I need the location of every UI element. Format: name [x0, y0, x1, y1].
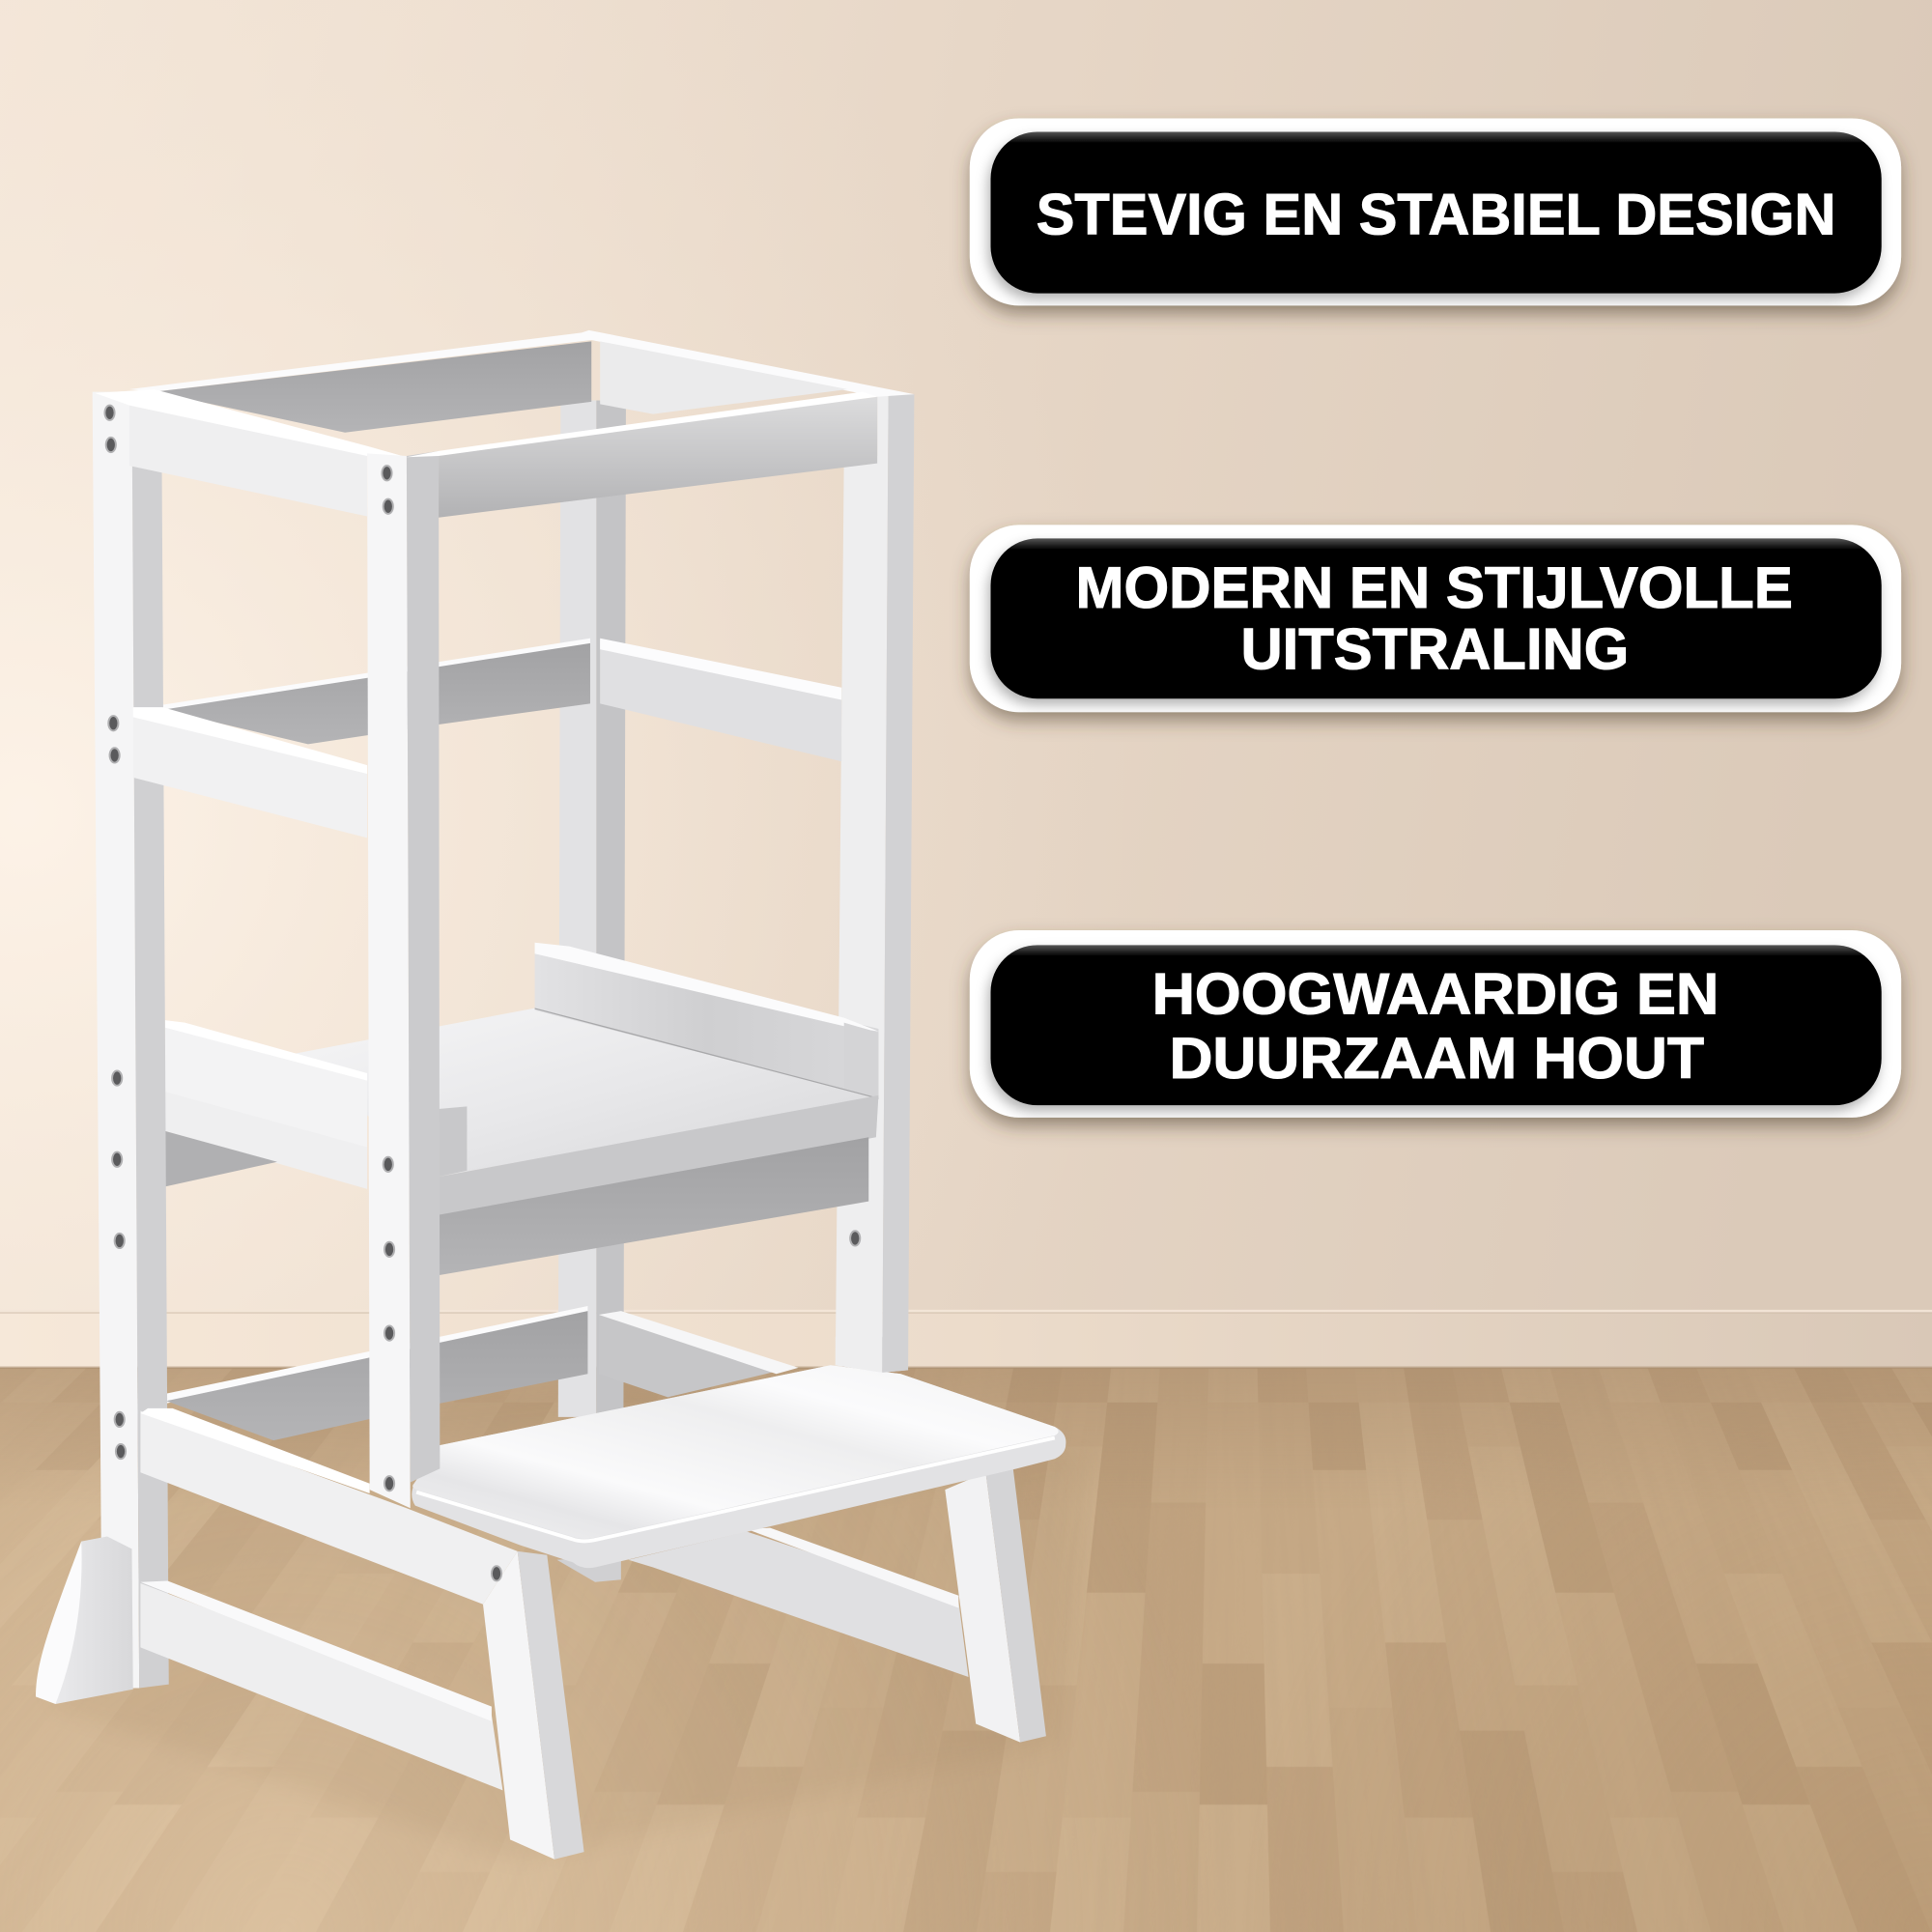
badge text: MODERN EN STIJLVOLLE: [1076, 555, 1793, 620]
platform front edge: [439, 1095, 878, 1217]
front left post: [93, 392, 169, 1688]
foot wedge: [36, 1537, 133, 1704]
top left rail: [129, 403, 367, 516]
floor lighting overlay: [0, 1367, 1932, 1932]
badge: stevig en stabiel design: [970, 118, 1901, 305]
lower left rail: [140, 1408, 518, 1605]
back centre post: [558, 401, 626, 1417]
badge text: HOOGWAARDIG EN: [1152, 962, 1719, 1027]
wooden floor planks: [0, 1368, 1932, 1932]
badge text: [1076, 555, 1793, 682]
badge text: UITSTRALING: [1240, 617, 1629, 682]
back post foot: [557, 1555, 621, 1582]
bolt holes: [104, 406, 860, 1580]
right stool leg: [945, 1466, 1046, 1743]
baseboard: [0, 1310, 1932, 1368]
badge text: [1152, 962, 1719, 1091]
platform seat: [296, 1008, 878, 1177]
middle left rail: [133, 710, 367, 838]
badge: modern en stijlvolle uitstraling: [970, 525, 1901, 712]
right back post: [836, 394, 914, 1373]
floor stretcher left: [140, 1580, 502, 1790]
bottom rails back and right: [166, 1306, 799, 1440]
badge: hoogwaardig en duurzaam hout: [970, 930, 1901, 1118]
top frame back rails: [129, 330, 914, 433]
learning tower: [36, 330, 1065, 1860]
right post foot on step: [836, 1337, 908, 1373]
top front rail: [407, 392, 877, 518]
left stool leg: [483, 1551, 584, 1860]
platform apron: [439, 1137, 868, 1275]
platform guard left: [165, 1020, 367, 1149]
badge text: DUURZAAM HOUT: [1169, 1026, 1704, 1091]
platform: [165, 943, 878, 1275]
left rails: [95, 389, 407, 838]
front right post: [367, 451, 440, 1508]
floor shadow beneath tower: [49, 1380, 1084, 1861]
badge text: STEVIG EN STABIEL DESIGN: [1037, 182, 1836, 246]
middle rails back and right: [162, 639, 841, 761]
right floor stretcher: [629, 1528, 969, 1677]
stool step: [412, 1365, 1065, 1568]
background wall: [0, 0, 1932, 1368]
platform guard right: [535, 947, 878, 1097]
